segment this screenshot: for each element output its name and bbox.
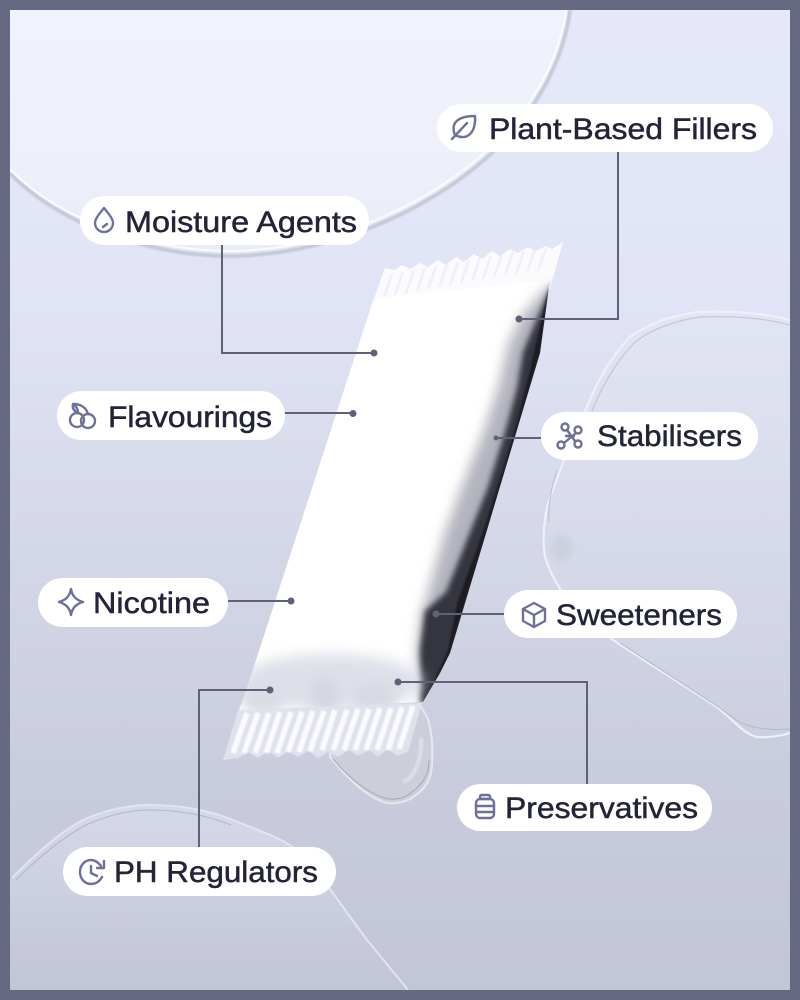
packet top seal [372, 242, 563, 304]
packet shading [238, 284, 560, 714]
label: nicotine [38, 578, 228, 627]
leader: plant-based fillers [516, 150, 618, 322]
icon: water drop [95, 208, 113, 232]
label: preservatives [457, 784, 712, 831]
label: stabilisers [541, 412, 758, 460]
packet [223, 242, 563, 760]
label: moisture agents [80, 196, 369, 245]
icon: molecule network [558, 424, 582, 448]
label: moisture agents: Moisture Agents [125, 206, 357, 239]
leader: stabilisers [494, 436, 541, 440]
icon: leaf [452, 116, 475, 139]
leader: flavourings [284, 410, 356, 417]
label: sweeteners [504, 590, 737, 638]
label: plant-based fillers [437, 104, 773, 152]
leader: sweeteners [432, 610, 505, 618]
glass lens: top left [10, 0, 570, 256]
label: plant-based fillers: Plant-Based Fillers [489, 113, 757, 146]
label: flavourings: Flavourings [108, 401, 272, 434]
label: nicotine: Nicotine [93, 587, 210, 620]
water droplet under packet [330, 705, 432, 803]
label: preservatives: Preservatives [505, 792, 698, 825]
label: ph regulators [63, 847, 336, 896]
leader: ph regulators [199, 686, 274, 849]
label: ph regulators: PH Regulators [114, 856, 318, 889]
glass lens: bottom left [10, 805, 408, 990]
leader: nicotine [227, 598, 294, 604]
leader: preservatives [394, 678, 587, 785]
packet top seal ridges [384, 248, 546, 297]
packet bottom seal [223, 703, 422, 760]
packet bottom seal ridges [233, 706, 413, 753]
label: sweeteners: Sweeteners [556, 599, 722, 632]
icon: cherries [70, 404, 95, 428]
glass blob: right [544, 312, 790, 737]
label: flavourings [57, 391, 285, 440]
icon: clock with arrow [80, 860, 104, 884]
label: stabilisers: Stabilisers [597, 420, 742, 453]
packet main body [238, 280, 549, 712]
icon: jar [476, 795, 494, 818]
icon: cube [523, 603, 545, 627]
leader: moisture agents [222, 243, 378, 356]
icon: four-point sparkle [59, 589, 83, 615]
